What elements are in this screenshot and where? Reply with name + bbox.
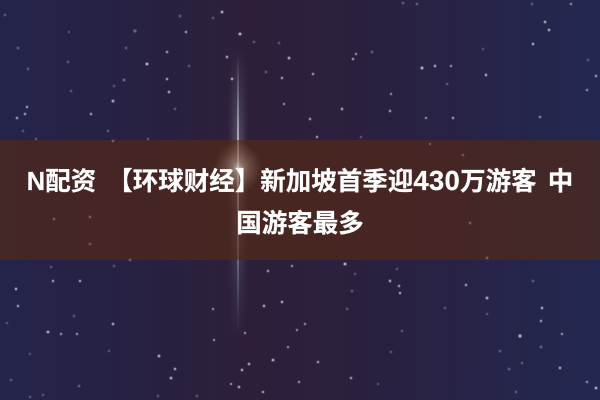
title text: N配资 【环球财经】新加坡首季迎430万游客 中: [27, 165, 573, 196]
light beam: [232, 45, 244, 345]
title text: [27, 165, 573, 238]
title band: [0, 140, 600, 260]
title text: 国游客最多: [236, 210, 364, 238]
